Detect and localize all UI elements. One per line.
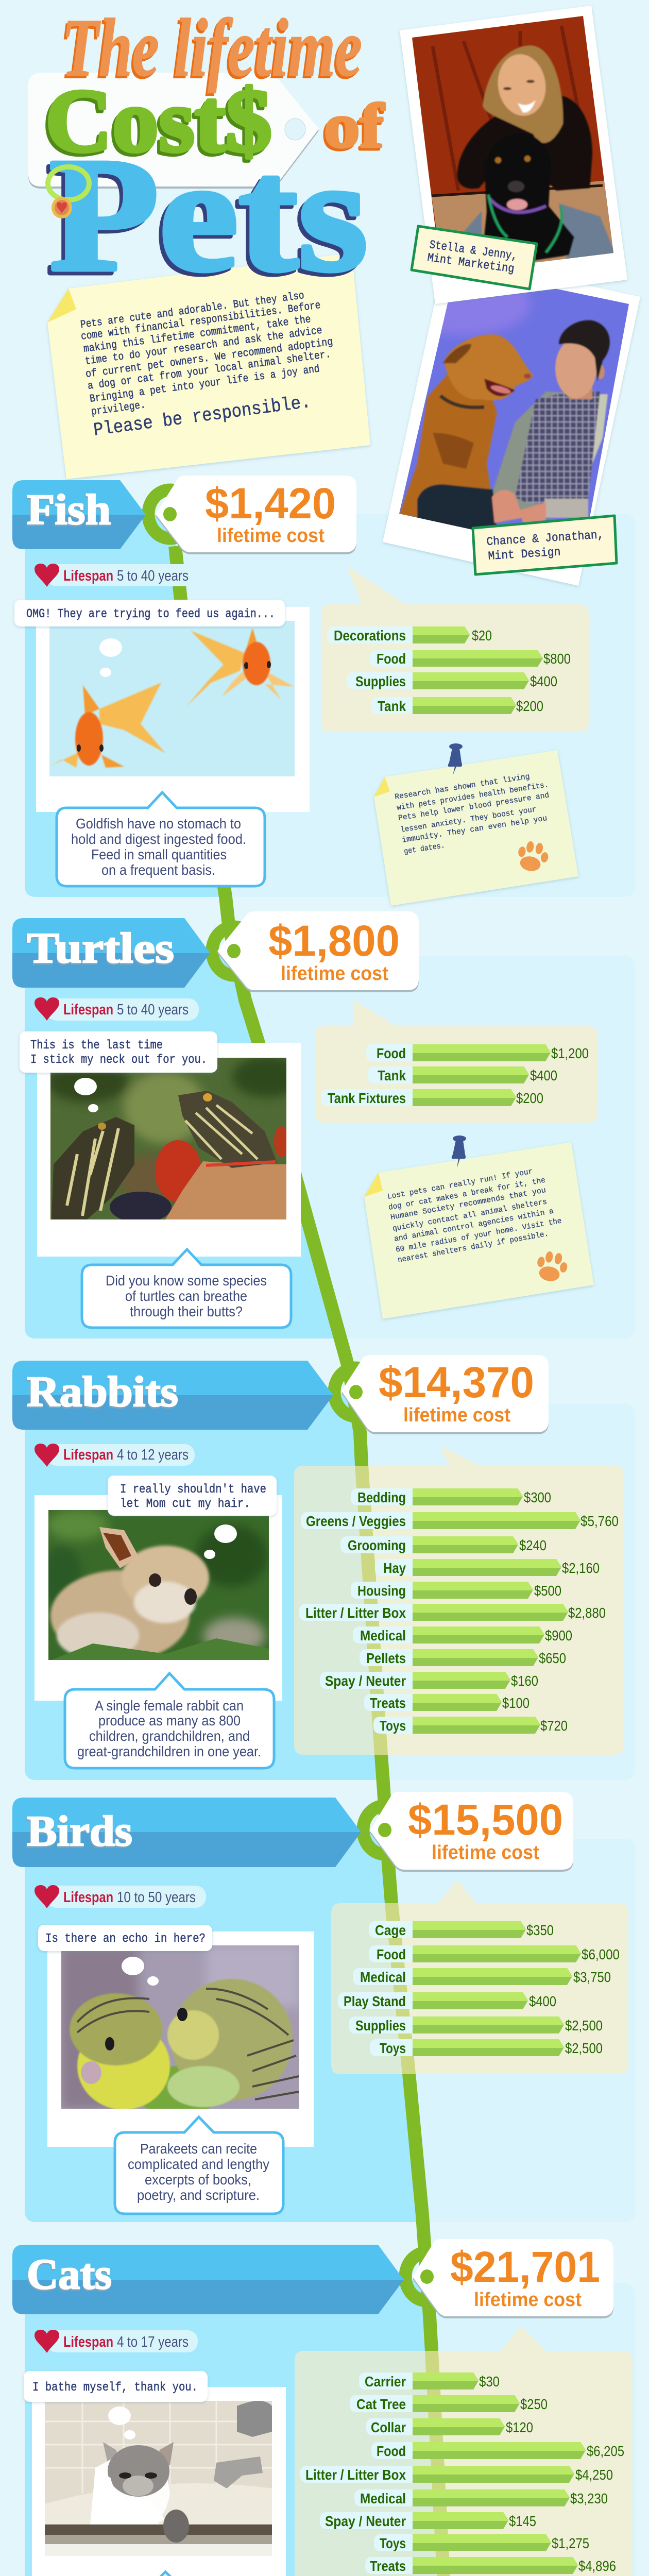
bar: Carrier: $30 — [479, 2374, 500, 2389]
bar: Food — [366, 1044, 589, 1061]
dog body and head — [399, 374, 497, 523]
heading banner: Fish: Fish — [27, 486, 111, 534]
fact callout: children, grandchildren, and — [89, 1728, 250, 1744]
icon: collar with heart tag — [48, 167, 89, 218]
bar: Carrier: Carrier — [365, 2374, 406, 2389]
heading banner: Cats — [12, 2245, 449, 2314]
intro note: privilege. — [91, 399, 146, 418]
lifespan badge — [35, 1444, 195, 1467]
icon: push pin — [452, 1136, 466, 1168]
bar: Medical — [353, 1968, 611, 1985]
bar: Medical — [353, 1626, 572, 1643]
hands — [492, 490, 523, 523]
bar: Litter / Litter Box: $4,250 — [575, 2467, 613, 2483]
fact callout: Did you know some species — [106, 1273, 267, 1289]
bar: Treats — [365, 2557, 616, 2574]
bar: Spay / Neuter: $160 — [511, 1673, 538, 1689]
polaroid: Chance & Jonathan — [383, 255, 640, 586]
bar: Supplies: Supplies — [355, 2018, 406, 2033]
speech bubble — [14, 600, 285, 626]
bar: Cage — [369, 1921, 554, 1938]
price tag: $15,500: $15,500 — [408, 1795, 563, 1844]
heading banner: Turtles: Turtles — [27, 924, 174, 972]
photo: rabbit polaroid — [35, 1495, 282, 1701]
price tag: $1,800 — [217, 911, 419, 990]
bar: Tank — [371, 697, 543, 714]
jacket and shirt — [491, 392, 608, 518]
bar: Cat Tree: $250 — [520, 2396, 548, 2412]
bar: Litter / Litter Box — [299, 1604, 606, 1621]
fact callout: great-grandchildren in one year. — [77, 1743, 261, 1759]
bar: Tank Fixtures: $200 — [516, 1090, 543, 1106]
fact callout: complicated and lengthy — [128, 2156, 269, 2172]
bar: Decorations: Decorations — [334, 628, 406, 643]
bar: Toys: Toys — [380, 2535, 406, 2551]
price tag: $15,500: lifetime cost — [432, 1842, 539, 1863]
price tag: $14,370 — [341, 1355, 549, 1432]
section: Birds — [12, 1792, 628, 2214]
heading banner: Fish — [12, 480, 192, 549]
bar: Pellets — [360, 1649, 566, 1666]
bar: Medical — [354, 2489, 608, 2506]
arrow: timeline of rising cost — [175, 546, 474, 2576]
bar: Supplies: Supplies — [355, 673, 406, 689]
heading banner: Cats: Cats — [27, 2250, 112, 2298]
bar: Play Stand: Play Stand — [344, 1993, 406, 2009]
price tag: $1,800: lifetime cost — [281, 963, 388, 985]
lifespan badge: Lifespan — [63, 2334, 113, 2350]
fact callout — [82, 1249, 291, 1328]
bar: Food: Food — [377, 2443, 406, 2459]
bar: Play Stand — [338, 1992, 556, 2009]
lifespan badge: 4 to 17 years — [117, 2334, 189, 2350]
bar chart: turtle costs — [315, 999, 597, 1123]
price tag: $21,701 — [413, 2239, 613, 2316]
fact callout: of turtles can breathe — [125, 1288, 247, 1304]
intro note: Please be responsible. — [92, 392, 312, 441]
bar: Toys: $1,275 — [552, 2535, 589, 2551]
lifespan badge — [35, 2330, 198, 2353]
lifespan badge: 10 to 50 years — [117, 1889, 196, 1906]
icon: paw — [516, 839, 551, 874]
heading banner: Birds: Birds — [27, 1807, 132, 1855]
intro note: Pets are cute and adorable. But they also — [80, 290, 305, 331]
sticky note: lost pets: nearest shelters daily if possible. — [397, 1230, 549, 1265]
bar chart: fish costs — [321, 566, 589, 732]
bar: Grooming — [340, 1536, 546, 1553]
speech bubble — [24, 2371, 208, 2402]
sticky note: lost pets: quickly contact all animal shelters — [392, 1197, 548, 1233]
speech bubble: let Mom cut my hair. — [120, 1497, 250, 1511]
price tag: $1,420: $1,420 — [205, 479, 336, 528]
bar: Food: Food — [377, 651, 406, 667]
lifespan badge: 5 to 40 years — [117, 568, 189, 584]
bar: Treats: $100 — [502, 1695, 530, 1711]
bar: Tank: $200 — [516, 698, 543, 714]
header — [28, 2, 385, 479]
bar: Toys: $2,500 — [565, 2040, 603, 2056]
lifespan badge: 5 to 40 years — [117, 1002, 189, 1018]
bar: Collar — [366, 2418, 533, 2435]
speech bubble: OMG! They are trying to feed us again... — [26, 607, 275, 621]
bar: Grooming: Grooming — [348, 1537, 406, 1553]
hair and face — [483, 45, 563, 143]
intro note: making this lifetime commitment, take the — [83, 314, 312, 355]
bar: Tank Fixtures: Tank Fixtures — [328, 1090, 406, 1106]
bar: Hay: Hay — [383, 1560, 406, 1576]
sticky note: health benefits: Pets help lower blood pressure and — [398, 791, 550, 823]
intro note: of current pet owners. We recommend adopting — [85, 336, 334, 381]
bar: Food: $6,205 — [587, 2443, 624, 2459]
bar: Carrier — [359, 2372, 500, 2389]
sticky note: health benefits: Research has shown that living — [394, 772, 531, 802]
speech bubble — [20, 1031, 217, 1073]
bar: Spay / Neuter: Spay / Neuter — [325, 1673, 406, 1689]
heading banner: Turtles — [12, 918, 255, 988]
fact callout — [57, 792, 265, 886]
bar chart: rabbit costs — [294, 1446, 624, 1755]
name label: Stella & Jenny — [412, 226, 537, 289]
jeans — [559, 204, 616, 260]
bar: Litter / Litter Box: $2,880 — [568, 1605, 606, 1621]
bar: Spay / Neuter — [320, 2512, 536, 2529]
fact callout: produce as many as 800 — [98, 1713, 241, 1728]
bar: Tank Fixtures — [321, 1089, 543, 1106]
bar: Cage: $350 — [526, 1922, 554, 1938]
heading banner: Birds — [12, 1798, 406, 1867]
fact callout: A single female rabbit can — [95, 1698, 244, 1714]
jeans — [417, 484, 497, 531]
photo: turtles polaroid — [37, 1043, 304, 1257]
bar: Tank — [368, 1066, 557, 1083]
bar: Food — [371, 2442, 624, 2459]
price tag: $15,500 — [370, 1792, 573, 1870]
photo: wet cat polaroid — [32, 2387, 286, 2576]
photo: parakeets polaroid — [47, 1931, 314, 2147]
fact callout: through their butts? — [130, 1303, 243, 1319]
fact callout: on a frequent basis. — [101, 862, 215, 878]
sticky note: health benefits: lessen anxiety. They boost your — [400, 805, 537, 835]
bar: Supplies: $2,500 — [565, 2018, 603, 2033]
fact callout: Feed in small quantities — [91, 846, 227, 862]
dog — [482, 133, 574, 263]
speech bubble: Is there an echo in here? — [45, 1932, 206, 1946]
bar: Treats — [364, 1694, 530, 1711]
intro note: Bringing a pet into your life is a joy and — [89, 363, 320, 405]
bar: Medical: $3,230 — [570, 2490, 608, 2506]
speech bubble — [108, 1476, 277, 1516]
speech bubble: I stick my neck out for you. — [30, 1053, 207, 1067]
fact callout — [115, 2117, 283, 2214]
bar: Food: Food — [377, 1045, 406, 1061]
sticky note: lost pets — [364, 1136, 594, 1319]
fact callout: hold and digest ingested food. — [71, 831, 246, 847]
bar: Toys — [373, 1717, 568, 1734]
icon: push pin — [448, 743, 463, 775]
speech bubble: I bathe myself, thank you. — [32, 2381, 198, 2395]
bar: Tank: Tank — [378, 698, 406, 714]
lifespan badge: 4 to 12 years — [117, 1447, 189, 1463]
fact callout: excerpts of books, — [145, 2172, 251, 2188]
title: Cost$: Cost$ — [45, 71, 272, 171]
fact callout: poetry, and scripture. — [137, 2187, 260, 2203]
speech bubble — [38, 1925, 212, 1951]
heading banner: Rabbits: Rabbits — [27, 1368, 178, 1416]
bar: Greens / Veggies: Greens / Veggies — [306, 1513, 406, 1529]
bar: Supplies: $400 — [530, 673, 557, 689]
bar: Treats: Treats — [370, 2558, 406, 2574]
bar: Spay / Neuter — [320, 1672, 538, 1689]
bar: Medical: $900 — [545, 1628, 572, 1643]
price tag: $1,420: lifetime cost — [217, 525, 324, 547]
intro note — [47, 253, 370, 479]
section: Cats — [12, 2239, 633, 2576]
sticky note: lost pets: Lost pets can really run! If your — [387, 1167, 534, 1201]
lifespan badge: Lifespan — [63, 568, 113, 584]
bar: Food: $6,000 — [582, 1946, 620, 1962]
section: Turtles — [12, 911, 597, 1328]
lifespan badge: Lifespan — [63, 1889, 113, 1906]
bar: Bedding — [351, 1488, 551, 1505]
sticky note: health benefits: immunity. They can even help you — [401, 814, 548, 845]
name label: Stella & Jenny: Stella & Jenny, — [429, 238, 518, 263]
price tag: $14,370: $14,370 — [379, 1358, 534, 1406]
bar: Collar: $120 — [506, 2419, 533, 2435]
bar: Food: $1,200 — [551, 1045, 589, 1061]
bar: Medical: Medical — [360, 1628, 406, 1643]
bar: Medical: Medical — [360, 1969, 406, 1985]
bar: Cat Tree: Cat Tree — [356, 2396, 406, 2412]
sticky note: health benefits: with pets provides health benefits. — [396, 781, 549, 812]
sticky note: lost pets: and animal control agencies within a — [394, 1207, 554, 1244]
title: Pets: Pets — [49, 125, 368, 305]
bar: Collar: Collar — [371, 2419, 406, 2435]
fact callout: Parakeets can recite — [140, 2141, 257, 2157]
intro note: a dog or cat from your local animal shelter. — [87, 349, 332, 393]
bar: Food — [369, 1945, 620, 1962]
price tag: $1,420 — [156, 476, 356, 552]
title: The lifetime: The lifetime — [62, 2, 362, 93]
name label: Chance & Jonathan: Chance & Jonathan, — [486, 528, 604, 549]
bar: Spay / Neuter: Spay / Neuter — [325, 2513, 406, 2529]
bar: Housing — [351, 1582, 561, 1599]
sticky note: lost pets: dog or cat makes a break for it, the — [388, 1176, 546, 1212]
bar: Pellets: $650 — [539, 1650, 566, 1666]
bar: Food: Food — [377, 1946, 406, 1962]
bar: Food — [370, 650, 571, 667]
bar: Decorations: $20 — [472, 628, 492, 643]
bar: Tank: Tank — [378, 1067, 406, 1083]
bar: Litter / Litter Box: Litter / Litter Box — [305, 2467, 406, 2483]
bar: Toys: $720 — [540, 1718, 568, 1734]
polaroid: Stella & Jenny — [400, 6, 627, 304]
bar: Housing: Housing — [357, 1583, 406, 1599]
bar: Hay — [375, 1559, 600, 1576]
icon: paw — [535, 1249, 570, 1284]
price tag behind title — [28, 73, 319, 187]
bar: Bedding: $300 — [524, 1489, 551, 1505]
bar: Tank: $400 — [530, 1067, 557, 1083]
bar: Medical: Medical — [360, 2490, 406, 2506]
speech bubble: I really shouldn't have — [120, 1483, 266, 1497]
bar: Toys — [374, 2534, 589, 2551]
heading banner: Rabbits — [12, 1361, 378, 1430]
sticky note: lost pets: Humane Society recommends that you — [390, 1186, 546, 1222]
fact callout — [61, 2572, 269, 2576]
bar: Spay / Neuter: $145 — [509, 2513, 536, 2529]
photo: goldfish polaroid — [36, 607, 310, 812]
sticky note: lost pets: 60 mile radius of your home. Visit the — [395, 1216, 562, 1255]
price tag: $1,800: $1,800 — [268, 917, 400, 965]
bar chart: bird costs — [331, 1880, 628, 2074]
bar: Toys: Toys — [380, 1718, 406, 1734]
intro note: come with financial responsibilities. Before — [80, 300, 321, 343]
intro note: time to do your research and ask the advice — [84, 325, 323, 368]
lifespan badge — [35, 564, 197, 587]
bar: Toys: Toys — [380, 2040, 406, 2056]
section: Fish — [12, 476, 589, 906]
sticky note: health benefits — [374, 743, 578, 906]
name label: Stella & Jenny: Mint Marketing — [426, 251, 515, 276]
bar: Hay: $2,160 — [562, 1560, 600, 1576]
bar: Decorations — [327, 626, 492, 643]
jacket — [457, 95, 592, 191]
price tag: $21,701: lifetime cost — [474, 2289, 582, 2311]
title: of: of — [324, 91, 385, 161]
bar: Greens / Veggies — [301, 1512, 619, 1529]
bar: Grooming: $240 — [519, 1537, 546, 1553]
bar: Medical: $3,750 — [573, 1969, 611, 1985]
bar: Toys — [370, 2039, 603, 2056]
lifespan badge — [35, 997, 199, 1021]
price tag: $21,701: $21,701 — [450, 2243, 600, 2291]
bar chart: cat costs — [295, 2326, 633, 2576]
bar: Cage: Cage — [375, 1922, 406, 1938]
name label: Chance & Jonathan — [473, 516, 617, 574]
lifespan badge — [35, 1885, 206, 1908]
sticky note: health benefits: get dates. — [403, 841, 446, 856]
bar: Supplies — [349, 2016, 603, 2033]
fact callout: Goldfish have no stomach to — [76, 816, 241, 832]
bar: Bedding: Bedding — [357, 1489, 406, 1505]
section: Rabbits — [12, 1355, 624, 1768]
bar: Housing: $500 — [534, 1583, 561, 1599]
bar: Food: $800 — [543, 651, 571, 667]
lifespan badge: Lifespan — [63, 1002, 113, 1018]
bar: Litter / Litter Box — [300, 2466, 613, 2483]
fact callout — [65, 1673, 274, 1768]
bar: Supplies — [347, 672, 557, 689]
bar: Pellets: Pellets — [366, 1650, 406, 1666]
speech bubble: This is the last time — [30, 1039, 163, 1053]
bar: Treats: Treats — [370, 1695, 406, 1711]
name label: Chance & Jonathan: Mint Design — [488, 545, 561, 563]
bar: Litter / Litter Box: Litter / Litter Box — [305, 1605, 406, 1621]
price tag: $14,370: lifetime cost — [403, 1404, 510, 1426]
bar: Cat Tree — [350, 2395, 548, 2412]
bar: Play Stand: $400 — [529, 1993, 556, 2009]
man's head — [568, 386, 593, 400]
bar: Treats: $4,896 — [578, 2558, 616, 2574]
lifespan badge: Lifespan — [63, 1447, 113, 1463]
bar: Greens / Veggies: $5,760 — [580, 1513, 619, 1529]
